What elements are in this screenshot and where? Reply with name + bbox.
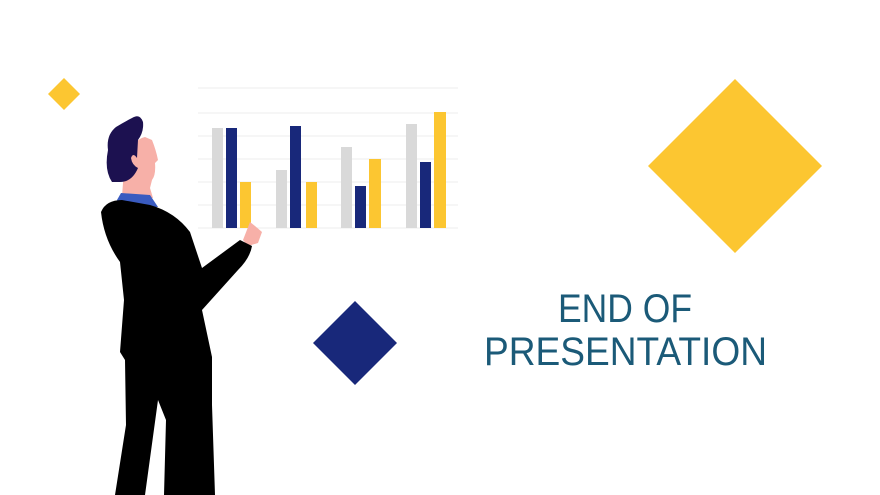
- big yellow diamond: [648, 79, 822, 253]
- hand: [243, 222, 262, 246]
- title: PRESENTATION: [484, 330, 767, 374]
- neck and face: [122, 137, 158, 198]
- hair: [107, 116, 143, 182]
- title: END OF: [558, 287, 692, 331]
- small yellow diamond: [48, 78, 80, 110]
- navy diamond: [313, 301, 397, 385]
- collar: [117, 193, 158, 207]
- title: [484, 287, 767, 374]
- person: [101, 116, 262, 495]
- suit body and arm: [101, 200, 252, 495]
- bar chart: [198, 88, 458, 228]
